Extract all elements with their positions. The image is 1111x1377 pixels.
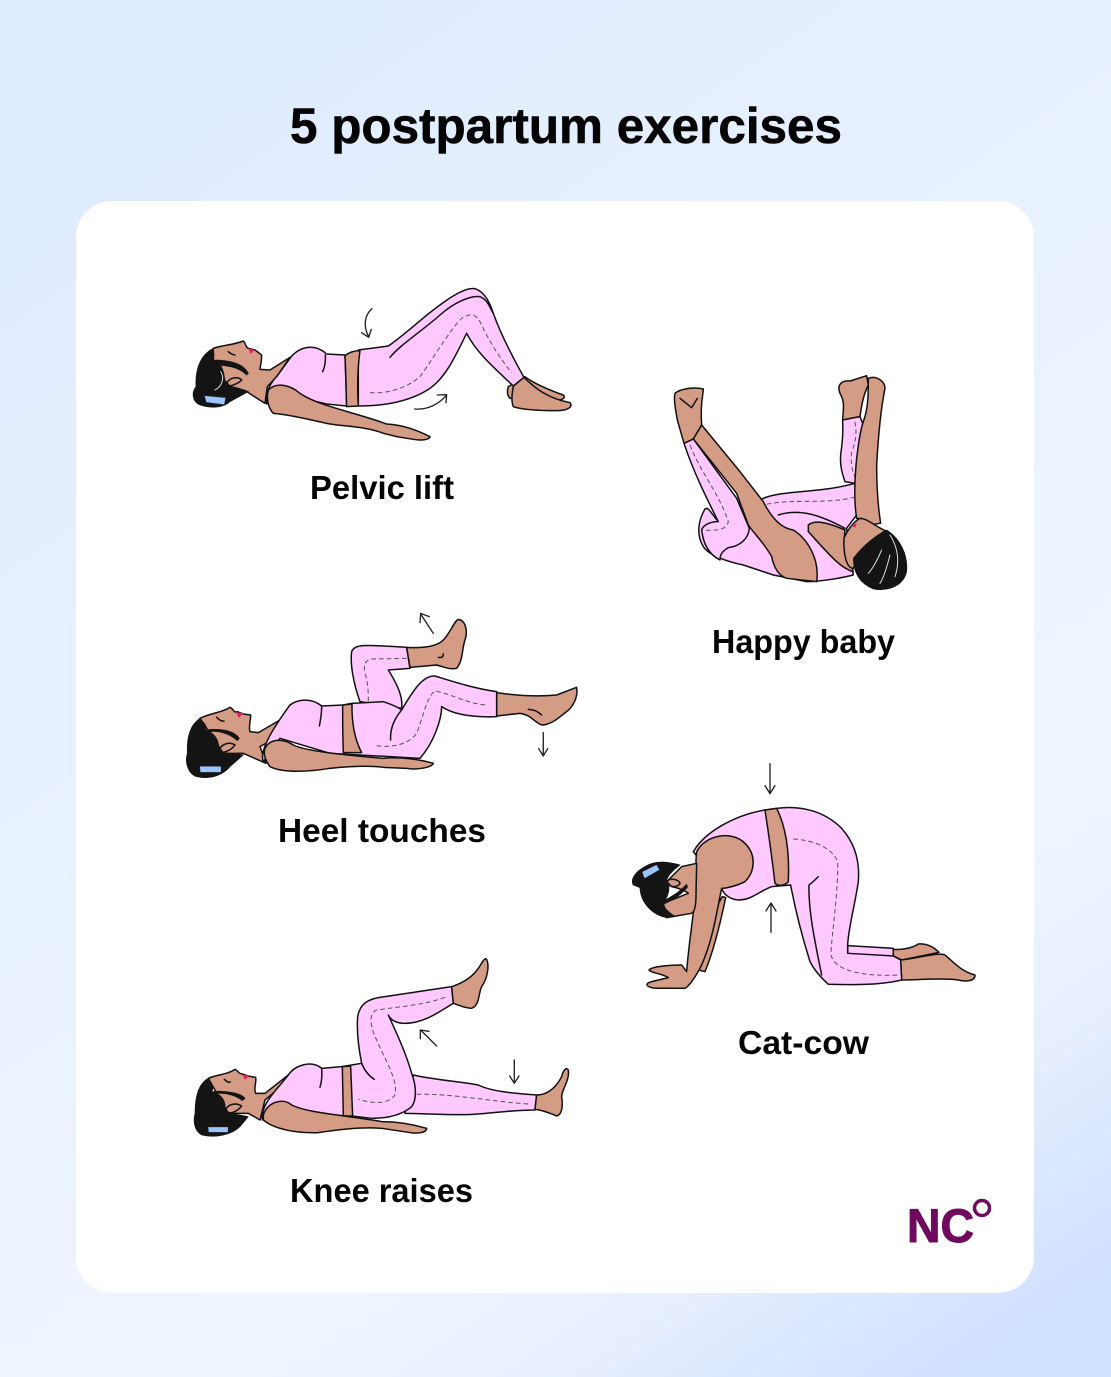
label: Knee raises: Knee raises (290, 1172, 473, 1209)
label: Cat-cow: Cat-cow (738, 1024, 869, 1061)
label: Pelvic lift: Pelvic lift (310, 469, 454, 506)
label: Heel touches: Heel touches (278, 812, 486, 849)
panel: exercises card (76, 201, 1034, 1293)
figure: heel touches (186, 613, 577, 778)
figure: cat-cow (632, 764, 975, 988)
label: Happy baby: Happy baby (712, 623, 896, 660)
figure: happy baby (674, 376, 907, 590)
title: 5 postpartum exercises (290, 98, 842, 154)
figure: knee raises (194, 959, 569, 1136)
figure: pelvic lift (193, 289, 571, 440)
logo: NC: NC (907, 1199, 974, 1252)
